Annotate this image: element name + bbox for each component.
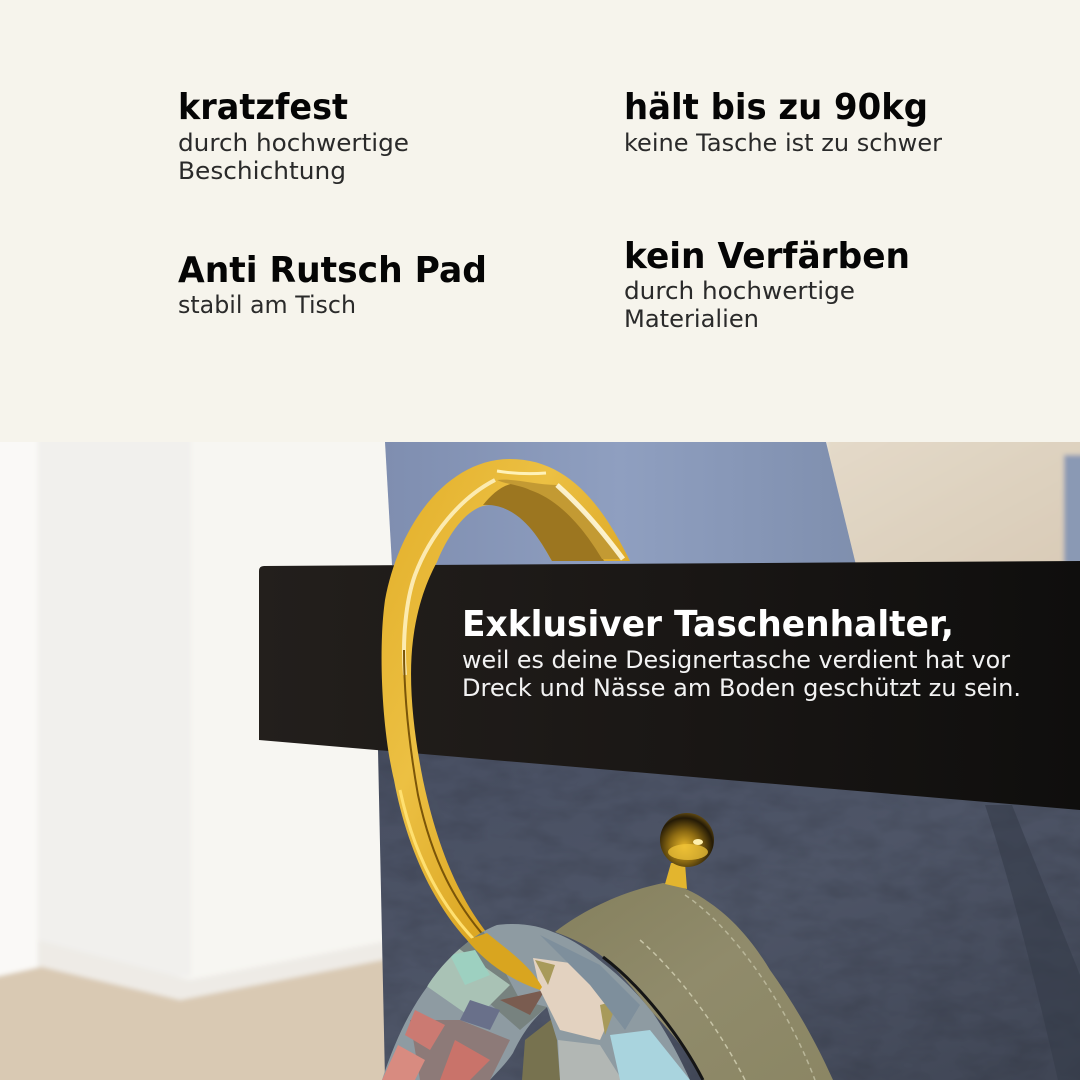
callout: Exklusiver Taschenhalter: weil es deine Designertasche verdient hat vor — [462, 646, 1010, 674]
feature: kein Verfärben: durch hochwertige — [624, 277, 855, 305]
feature: kratzfest: Beschichtung — [178, 157, 346, 185]
feature: kein Verfärben — [624, 236, 910, 333]
feature: hält bis zu 90kg: keine Tasche ist zu schwer — [624, 129, 942, 157]
chair lower — [378, 750, 1080, 1080]
photo: bag hook on table — [0, 436, 1080, 1080]
feature: kein Verfärben: kein Verfärben — [624, 236, 910, 277]
leather strap — [555, 883, 833, 1080]
feature: Anti Rutsch Pad: stabil am Tisch — [178, 291, 356, 319]
chair upper — [385, 442, 856, 565]
scarf — [378, 920, 698, 1080]
feature: hält bis zu 90kg — [624, 87, 942, 157]
top background panel — [0, 0, 1080, 442]
photo background wall — [0, 436, 1080, 1080]
feature: kratzfest — [178, 87, 409, 185]
callout: Exklusiver Taschenhalter — [462, 604, 1021, 702]
callout: Exklusiver Taschenhalter: Dreck und Nässe am Boden geschützt zu sein. — [462, 674, 1021, 702]
feature: kratzfest: durch hochwertige — [178, 129, 409, 157]
feature: Anti Rutsch Pad — [178, 250, 487, 319]
knob — [660, 813, 714, 889]
feature: hält bis zu 90kg: hält bis zu 90kg — [624, 87, 928, 128]
feature: kein Verfärben: Materialien — [624, 305, 759, 333]
feature: Anti Rutsch Pad: Anti Rutsch Pad — [178, 250, 487, 291]
ring end over scarf — [467, 933, 542, 990]
strap back — [522, 1020, 560, 1080]
gold ring — [382, 459, 630, 990]
callout: Exklusiver Taschenhalter: Exklusiver Taschenhalter, — [462, 604, 954, 645]
feature: kratzfest: kratzfest — [178, 87, 348, 128]
table bar — [259, 561, 1080, 810]
